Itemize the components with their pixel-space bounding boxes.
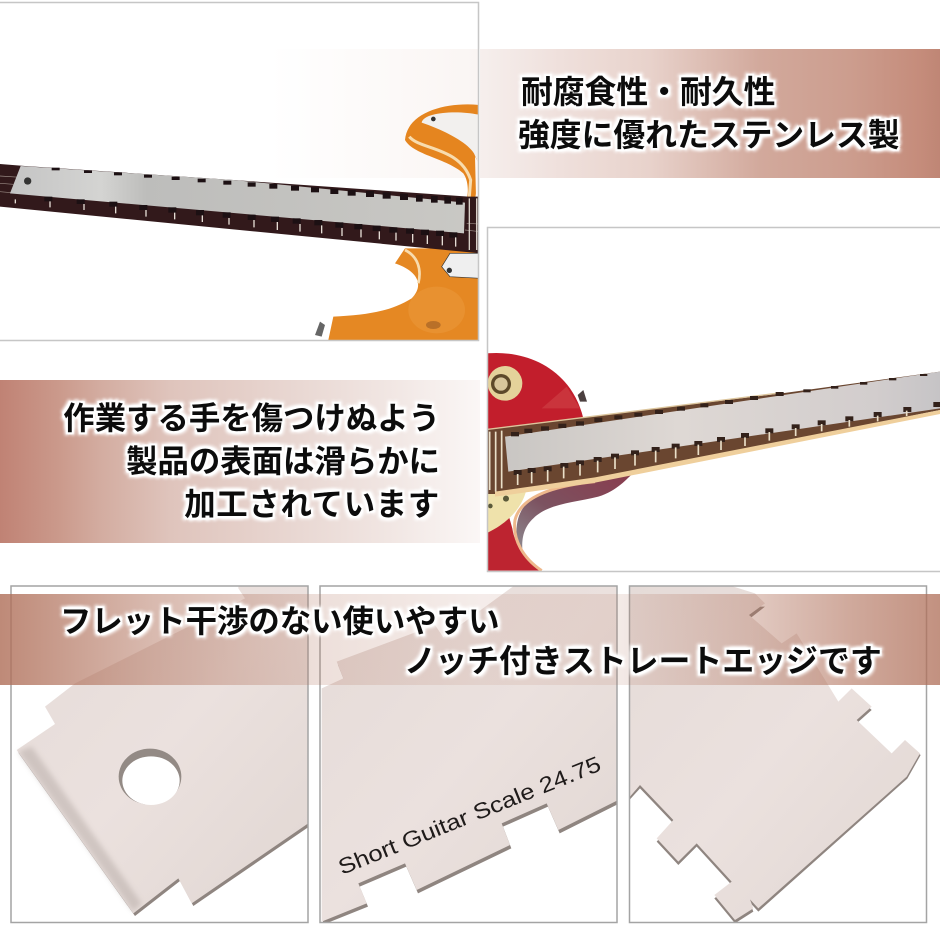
text: smooth surface: 作業する手を傷つけぬよう	[63, 401, 440, 436]
heading: corrosion resistance: 耐腐食性・耐久性	[521, 74, 775, 110]
heading: corrosion resistance	[516, 71, 903, 154]
text: smooth surface	[60, 397, 440, 522]
steel close-up 1 with hole	[17, 585, 310, 916]
band: bottom across panels	[0, 594, 940, 685]
text: smooth surface: 加工されています	[184, 487, 440, 522]
engraved text: Short Guitar Scale 24.75	[335, 751, 604, 880]
heading: corrosion resistance: 強度に優れたステンレス製	[518, 117, 900, 153]
band: middle left	[0, 380, 480, 543]
heading: notched straight edge line 1: フレット干渉のない使いやすい	[60, 604, 499, 639]
band: top right	[480, 49, 940, 178]
photo: red guitar with straight edge	[488, 353, 940, 571]
steel close-up 3 with notches	[630, 585, 921, 923]
steel close-up 2 with engraving	[322, 585, 620, 925]
photo: orange guitar with straight edge	[0, 49, 480, 340]
heading: notched straight edge line 2: ノッチ付きストレートエッジです	[404, 643, 882, 679]
text: smooth surface: 製品の表面は滑らかに	[126, 444, 440, 479]
